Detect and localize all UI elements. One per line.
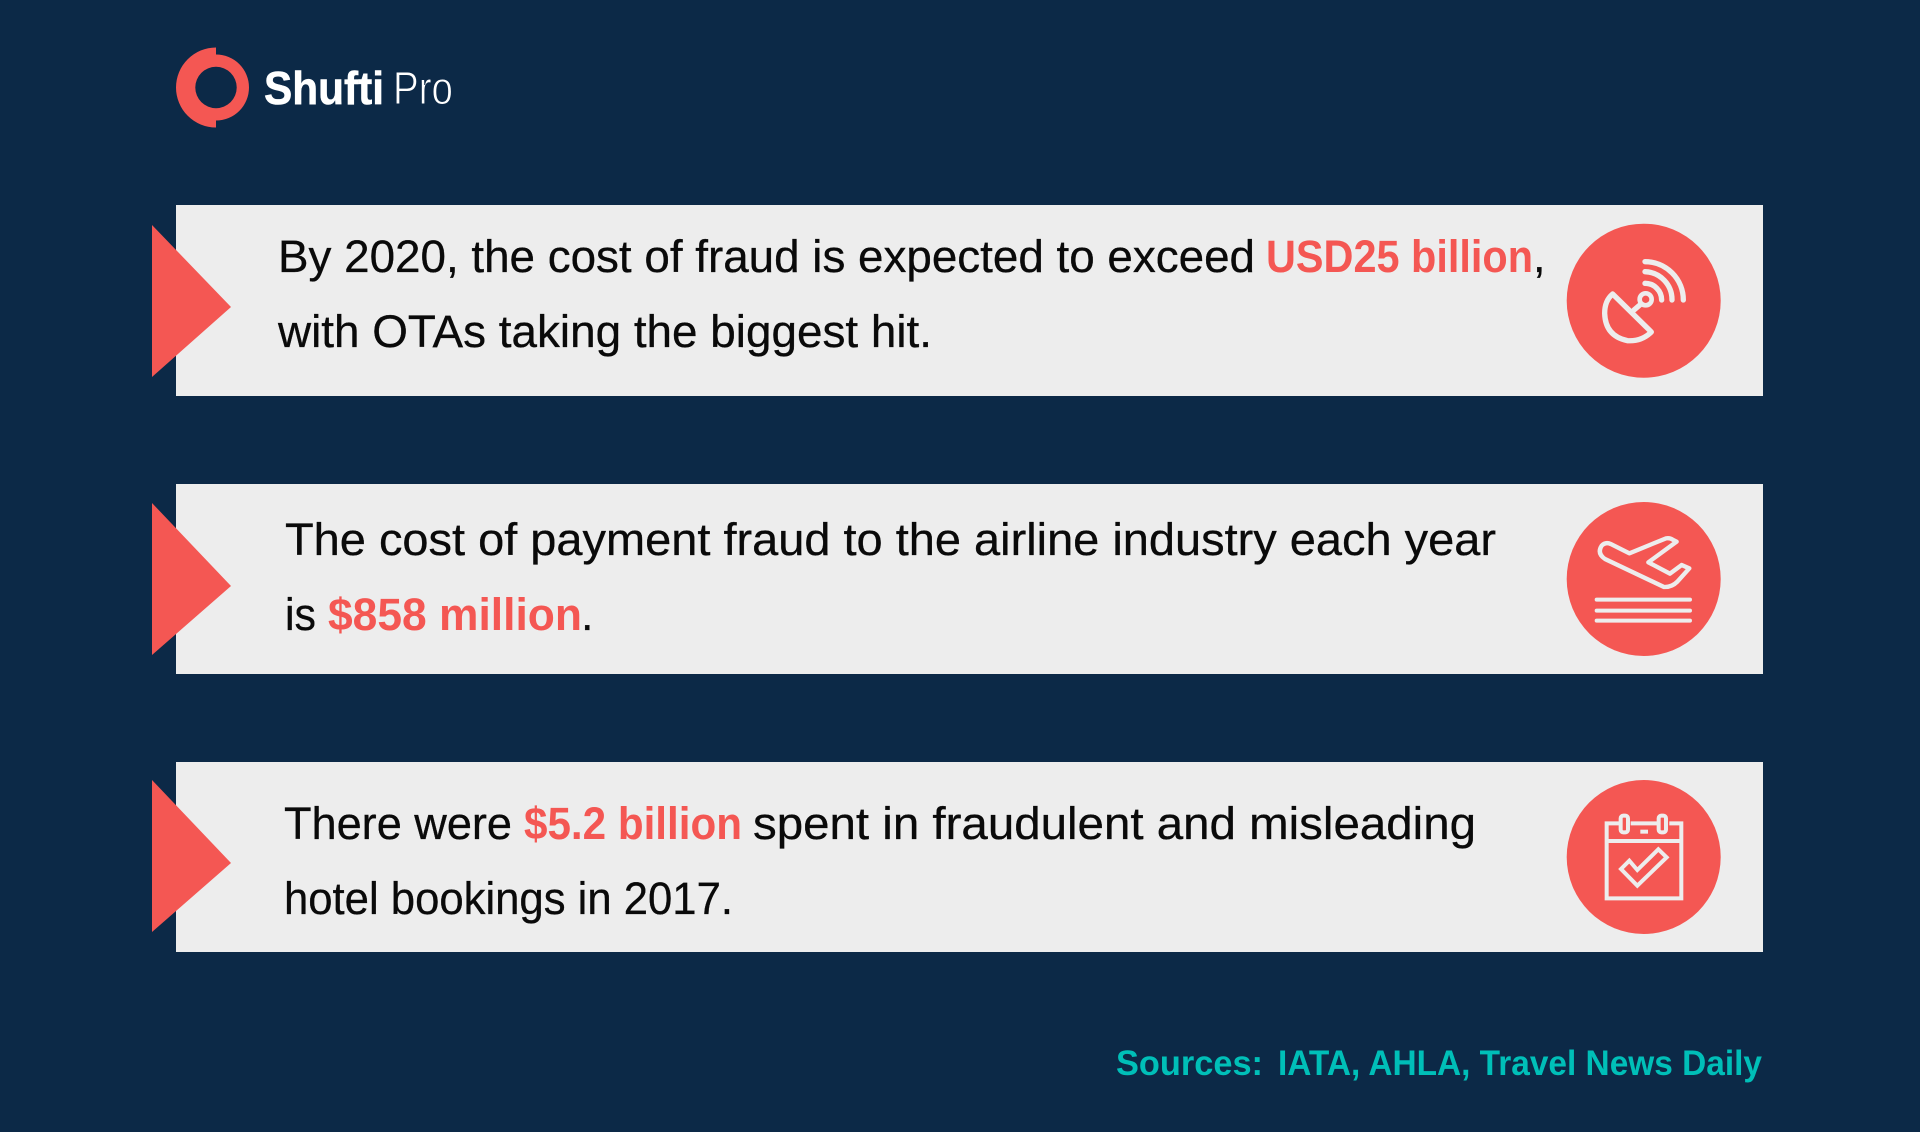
sources line: Sources: [1116, 1044, 1263, 1083]
text block [277, 231, 1546, 357]
icon: logo ring [176, 48, 249, 128]
logo: Shufti Pro [176, 48, 453, 128]
text block [285, 514, 1496, 640]
panel: fraud cost 2020 [152, 205, 1763, 396]
panel: airline payment fraud [152, 484, 1763, 674]
text block: hotel bookings in 2017. [284, 873, 733, 924]
text block: By 2020, the cost of fraud is expected to exceed [278, 231, 1255, 282]
text block: There were [284, 798, 512, 849]
icon: satellite dish [1567, 224, 1721, 378]
text block: $5.2 billion [524, 798, 742, 849]
icon: calendar with check [1567, 780, 1721, 934]
logo wordmark: Shufti [264, 62, 384, 114]
text block: , [1533, 231, 1546, 282]
text block: USD25 billion [1266, 231, 1533, 282]
text block: with OTAs taking the biggest hit. [277, 306, 932, 357]
text block: spent in fraudulent and misleading [753, 798, 1476, 849]
arrow marker [152, 780, 231, 932]
arrow marker [152, 503, 231, 655]
panel: hotel booking fraud [152, 762, 1763, 952]
text block: The cost of payment fraud to the airline industry each year [285, 514, 1496, 565]
logo wordmark [264, 62, 453, 114]
sources line: IATA, AHLA, Travel News Daily [1278, 1044, 1762, 1083]
icon: airplane taking off [1567, 502, 1721, 656]
text block: is [285, 589, 316, 640]
arrow marker [152, 225, 231, 377]
text block: $858 million [328, 589, 582, 640]
text block: . [581, 589, 594, 640]
text block [284, 798, 1476, 924]
logo wordmark: Pro [393, 62, 453, 114]
